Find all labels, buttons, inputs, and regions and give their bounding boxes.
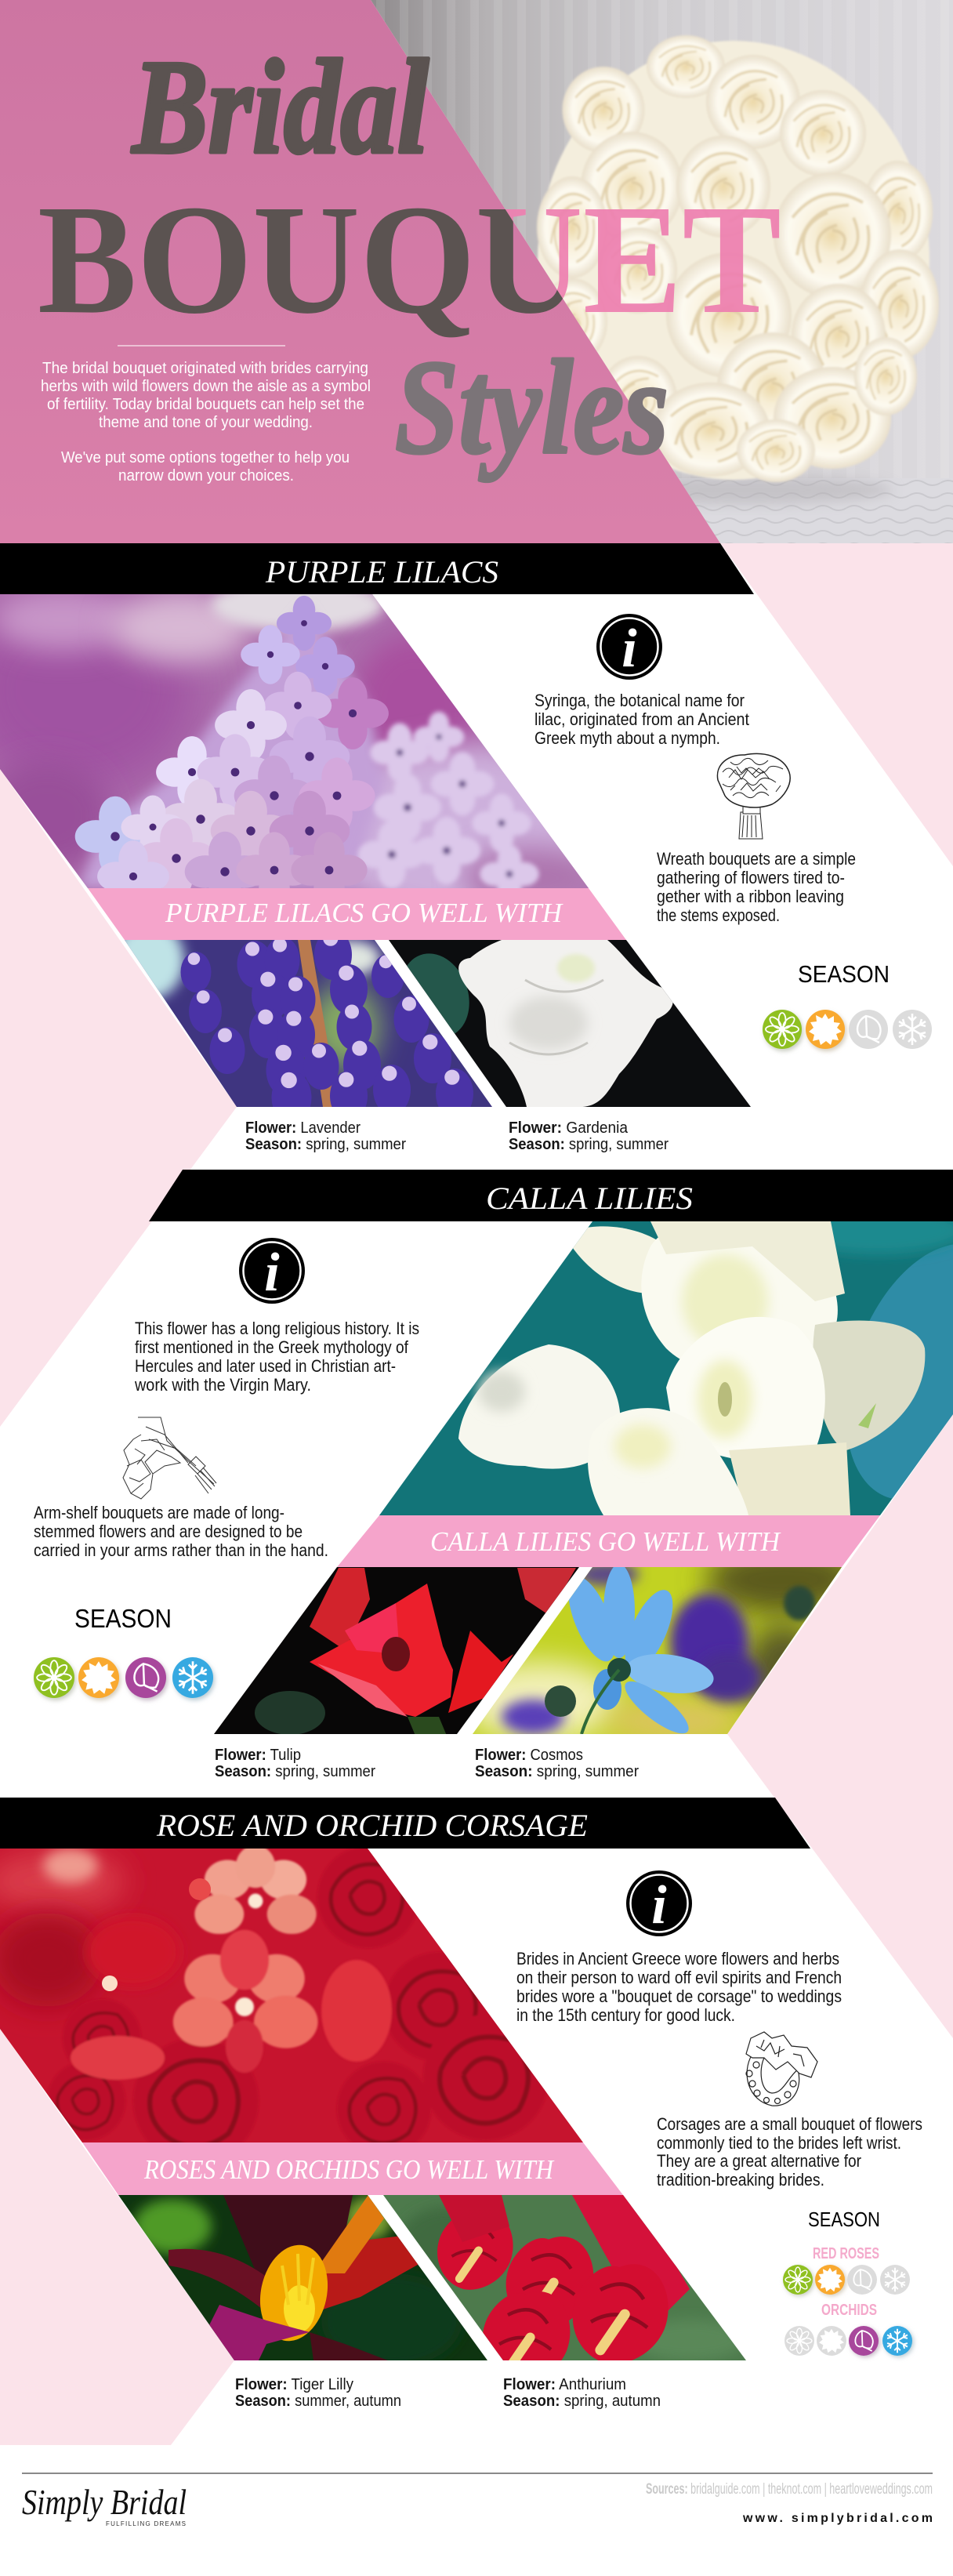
text: calla history: This flower has a long religious history. It is xyxy=(135,1319,419,1338)
text: calla history: work with the Virgin Mary. xyxy=(134,1375,311,1395)
icon: winter, inactive xyxy=(893,1010,932,1049)
text: corsage history: in the 15th century for good luck. xyxy=(516,2005,735,2025)
text: wreath bouquets xyxy=(657,849,856,925)
text: corsages: tradition-breaking brides. xyxy=(657,2170,824,2190)
section: rose and orchid corsage xyxy=(0,1798,922,2410)
season label: SEASON xyxy=(808,2208,880,2231)
icon: spring xyxy=(763,1010,802,1049)
icon: winter xyxy=(882,2326,912,2356)
icon: info: i xyxy=(621,619,637,679)
text: calla history: first mentioned in the Greek mythology of xyxy=(135,1337,409,1357)
caption: tulip: Flower: Tulip xyxy=(215,1747,301,1764)
photo: tulip xyxy=(212,1567,588,1736)
light pink background shapes xyxy=(0,543,953,2445)
text: calla history xyxy=(134,1319,419,1395)
website: www. simplybridal.com xyxy=(742,2512,933,2525)
text: lilac history: Syringa, the botanical name for xyxy=(534,691,745,710)
section heading: calla lilies: CALLA LILIES xyxy=(486,1181,693,1216)
intro text: theme and tone of your wedding. xyxy=(99,414,313,431)
intro text xyxy=(41,360,371,484)
caption: tiger lily xyxy=(235,2376,401,2410)
logo: Simply Bridal: FULFILLING DREAMS xyxy=(106,2520,186,2527)
text: corsage history: Brides in Ancient Greece wore flowers and herbs xyxy=(516,1949,839,1968)
section: calla lilies xyxy=(34,1170,953,1780)
icon: summer xyxy=(815,2265,845,2295)
text: arm-shelf bouquets: Arm-shelf bouquets are made of long- xyxy=(34,1503,284,1522)
photo: anthurium xyxy=(383,2195,746,2360)
band: roses and orchids go well with: ROSES AND ORCHIDS GO WELL WITH xyxy=(143,2154,555,2185)
header photo: white rose bouquet xyxy=(371,0,953,543)
season icons xyxy=(763,1010,932,1051)
band: roses and orchids go well with xyxy=(82,2142,623,2195)
band: purple lilacs go well with xyxy=(88,888,626,940)
icon: autumn xyxy=(125,1657,166,1698)
text: lilac history xyxy=(534,691,749,748)
season icons: red roses xyxy=(783,2265,910,2296)
text: wreath bouquets: Wreath bouquets are a simple xyxy=(657,849,856,869)
band: purple lilacs go well with: PURPLE LILACS GO WELL WITH xyxy=(165,898,563,928)
icon: autumn, inactive xyxy=(849,1010,888,1049)
photo: gardenia xyxy=(384,940,760,1108)
caption: gardenia: Flower: Gardenia xyxy=(509,1119,629,1137)
caption: gardenia: Season: spring, summer xyxy=(509,1136,669,1153)
season icons xyxy=(34,1657,215,1700)
pink title panel xyxy=(0,0,720,543)
text: corsages: They are a great alternative for xyxy=(657,2151,861,2171)
section: purple lilacs xyxy=(0,543,932,1153)
icon: arm-shelf bouquet xyxy=(123,1417,216,1499)
icon: info: i xyxy=(264,1243,280,1303)
icon: spring, inactive xyxy=(785,2326,814,2356)
text: arm-shelf bouquets: stemmed flowers and are designed to be xyxy=(34,1522,303,1541)
caption: cosmos: Season: spring, summer xyxy=(475,1763,639,1780)
photo: tiger lily xyxy=(118,2195,494,2367)
title word: Styles: Styles xyxy=(395,333,669,482)
caption: lavender: Season: spring, summer xyxy=(245,1136,406,1153)
caption: lavender: Flower: Lavender xyxy=(245,1119,361,1137)
text: wreath bouquets: gether with a ribbon leaving xyxy=(657,887,844,906)
band: calla lilies go well with: CALLA LILIES GO WELL WITH xyxy=(430,1526,781,1557)
icon: winter, inactive xyxy=(880,2265,910,2295)
icon: summer xyxy=(806,1010,845,1049)
photo: lavender xyxy=(125,940,492,1107)
icon: winter xyxy=(172,1657,213,1698)
title word: Bouquet, pink part: BOUQUET xyxy=(38,173,781,346)
icon: autumn, inactive xyxy=(847,2265,877,2295)
section heading: rose and orchid corsage: ROSE AND ORCHID CORSAGE xyxy=(156,1808,588,1843)
icon: info: i xyxy=(651,1875,667,1936)
icon: spring xyxy=(34,1657,74,1698)
icon: info xyxy=(626,1870,692,1936)
caption: anthurium: Season: spring, autumn xyxy=(503,2393,661,2410)
section banner: rose and orchid corsage xyxy=(0,1798,810,1849)
logo: Simply Bridal: Simply Bridal xyxy=(22,2482,187,2522)
footer xyxy=(22,2473,933,2527)
label: orchids: ORCHIDS xyxy=(821,2302,877,2319)
caption: anthurium xyxy=(503,2376,661,2410)
text: corsage history: brides wore a "bouquet de corsage" to weddings xyxy=(516,1986,842,2006)
intro text: We've put some options together to help you xyxy=(61,449,350,466)
caption: cosmos: Flower: Cosmos xyxy=(475,1747,583,1764)
caption: tiger lily: Season: summer, autumn xyxy=(235,2393,401,2410)
season label: SEASON xyxy=(74,1604,172,1633)
icon: corsage xyxy=(746,2032,817,2106)
icon: summer, inactive xyxy=(817,2326,846,2356)
icon: summer xyxy=(78,1657,119,1698)
intro text: The bridal bouquet originated with brides carrying xyxy=(42,360,368,377)
section banner: purple lilacs xyxy=(0,543,754,594)
season label: SEASON xyxy=(798,960,890,988)
section banner: calla lilies xyxy=(149,1170,953,1221)
text: lilac history: lilac, originated from an Ancient xyxy=(534,709,749,729)
photo: calla lilies xyxy=(376,1207,953,1524)
caption: gardenia xyxy=(509,1119,669,1153)
text: wreath bouquets: gathering of flowers tired to- xyxy=(657,868,845,887)
caption: tulip xyxy=(215,1747,375,1780)
title xyxy=(38,33,781,482)
text: wreath bouquets: the stems exposed. xyxy=(657,905,780,925)
caption: cosmos xyxy=(475,1747,639,1780)
title word: Bridal: Bridal xyxy=(131,33,429,182)
photo: cosmos xyxy=(473,1567,842,1734)
caption: tulip: Season: spring, summer xyxy=(215,1763,375,1780)
text: corsages: commonly tied to the brides left wrist. xyxy=(657,2133,901,2153)
caption: tiger lily: Flower: Tiger Lilly xyxy=(235,2376,353,2393)
icon: info xyxy=(596,614,662,680)
icon: autumn xyxy=(849,2326,879,2356)
photo: roses and orchids xyxy=(0,1845,596,2164)
label: red roses: RED ROSES xyxy=(813,2245,879,2262)
intro text: of fertility. Today bridal bouquets can help set the xyxy=(47,396,364,413)
section heading: purple lilacs: PURPLE LILACS xyxy=(265,554,498,590)
text: arm-shelf bouquets xyxy=(34,1503,328,1560)
photo: lilac blossoms xyxy=(0,594,589,888)
text: corsages xyxy=(657,2114,922,2190)
intro text: narrow down your choices. xyxy=(118,467,294,484)
season icons: orchids xyxy=(785,2326,914,2357)
caption: anthurium: Flower: Anthurium xyxy=(503,2376,626,2393)
caption: lavender xyxy=(245,1119,406,1153)
intro text: herbs with wild flowers down the aisle as a symbol xyxy=(41,378,371,395)
text: lilac history: Greek myth about a nymph. xyxy=(534,728,720,748)
title word: Bouquet, dark part: BOUQUET xyxy=(38,173,781,346)
icon: spring xyxy=(783,2265,813,2295)
icon: wreath bouquet xyxy=(717,753,790,839)
band: calla lilies go well with xyxy=(337,1515,880,1567)
text: corsage history: on their person to ward off evil spirits and French xyxy=(516,1968,842,1987)
text: corsage history xyxy=(516,1949,842,2025)
icon: info xyxy=(239,1238,305,1304)
text: calla history: Hercules and later used in Christian art- xyxy=(135,1356,396,1376)
text: arm-shelf bouquets: carried in your arms rather than in the hand. xyxy=(34,1540,328,1560)
